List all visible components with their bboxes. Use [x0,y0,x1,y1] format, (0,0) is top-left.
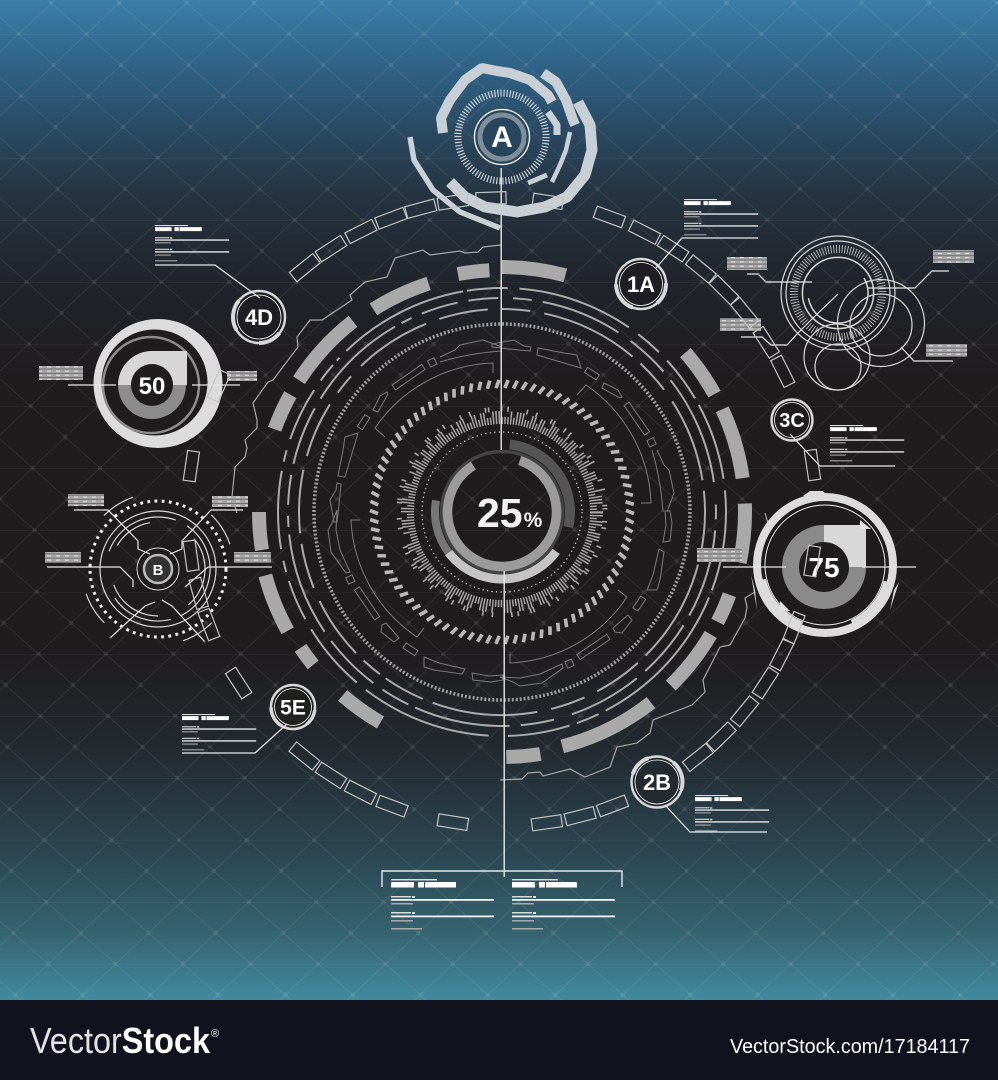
center value: 25% [477,490,543,536]
connectors [47,510,272,642]
ring thickening [744,484,906,646]
rings [51,462,265,676]
ring cutout [102,330,208,436]
connector line: top [500,168,502,450]
labels [39,366,257,381]
badge 3C [772,400,812,440]
dotted ring [422,432,582,592]
connector lines [741,271,953,361]
thick outer ring [94,319,222,448]
info block: 1A [656,199,758,268]
badge 5E [268,682,318,732]
center progress rings [408,418,596,606]
lines [723,566,916,568]
bottom bracket [382,871,622,887]
badge 4D [222,280,296,354]
ring cutout [761,501,889,629]
widget: B target [45,462,272,676]
data labels [720,250,974,357]
info block: 2B [665,795,769,832]
footer logo: VectorStock [30,1020,211,1061]
badge 3C: 3C [779,410,805,432]
thin ring [765,505,885,625]
equalizer bar ring [357,367,647,657]
widget: 50 gauge [39,319,257,448]
info block: 5E [182,714,287,753]
badge 5E: 5E [280,696,306,720]
thin dashed rings [253,263,751,761]
info block: 3C [790,425,904,466]
thick outer ring [753,493,897,637]
widget A [410,68,592,228]
badge 4D: 4D [245,305,273,330]
outer jagged wire [232,245,770,780]
lines [68,384,240,386]
light corner sector [824,525,866,567]
label B: B [153,562,164,579]
connector line: bottom [504,571,505,877]
outer bumps [751,491,899,610]
info block: bottom left [391,879,494,930]
thin ring [103,337,199,433]
labels [45,494,271,563]
widget: overlapping circles [720,233,974,390]
core circle [474,110,530,164]
label A: A [491,121,513,154]
lower gray sector [118,385,186,419]
badge 1A: 1A [627,272,655,297]
tick ring [458,93,546,181]
notches [779,520,871,611]
widget: 75 gauge [697,484,916,646]
footer bar [0,1000,998,1080]
info block: bottom right [512,879,615,930]
gray donut [790,534,858,600]
badge 2B [624,749,690,815]
outlined rectangle ring [183,192,821,831]
info block: 4D [155,225,260,298]
upper light sector [118,351,187,385]
inner wire shapes [328,340,674,686]
core [144,555,172,583]
label [697,548,742,562]
rings [778,233,924,390]
dotted ring [90,501,226,637]
badge 1A [616,259,666,309]
value 75: 75 [808,552,840,583]
badge 2B: 2B [643,770,671,795]
thick gray segment ring [159,169,845,855]
footer url: VectorStock.com/17184117 [730,1036,970,1058]
footer registered mark: ® [211,1028,219,1040]
inner ring [480,115,524,159]
jagged arcs [410,68,592,228]
central radial dial [159,169,845,855]
value 50: 50 [139,373,165,400]
slanted hatched ring [284,337,644,685]
